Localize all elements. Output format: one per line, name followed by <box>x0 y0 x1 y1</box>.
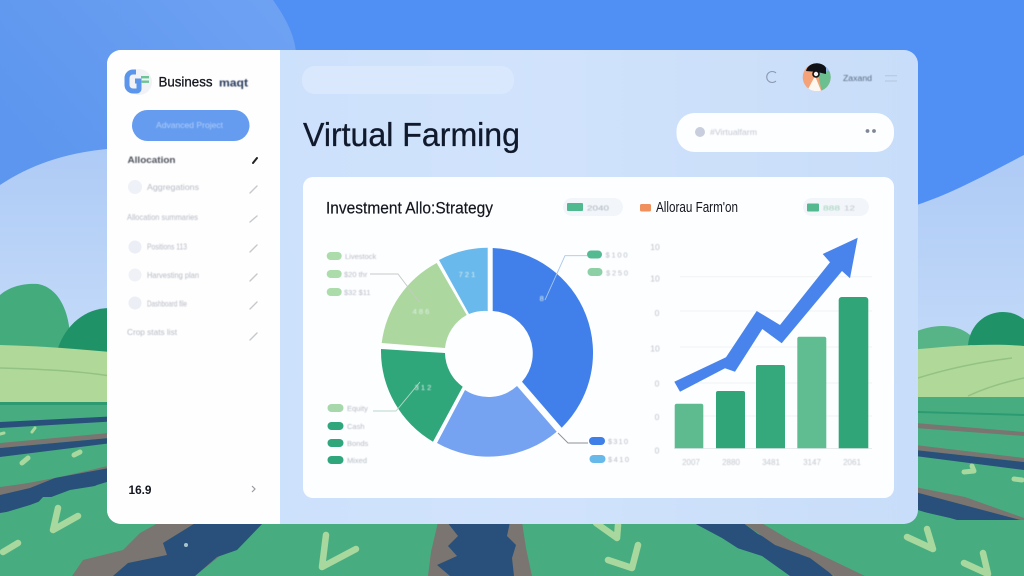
donut value labels: 3 1 2 <box>415 383 431 392</box>
x axis labels: 2880 <box>722 458 740 467</box>
menu icon <box>885 76 897 81</box>
donut legend chip: 2040 <box>587 204 609 212</box>
donut legend: lower left: Bonds <box>347 439 369 448</box>
segment: periwinkle <box>437 386 557 457</box>
bar legend chip <box>803 198 869 216</box>
menu item 3: Positions 113 <box>147 242 187 252</box>
left light field <box>0 345 120 405</box>
segment: dark green <box>381 349 463 442</box>
donut legend: lower left: Equity <box>347 404 368 413</box>
right hills <box>915 312 1024 352</box>
bar chart heading: Allorau Farm'on <box>656 199 738 216</box>
title: Virtual Farming <box>303 116 520 153</box>
bar legend chip: 888 <box>823 204 840 212</box>
donut legend: upper right <box>587 250 628 278</box>
bars <box>675 297 868 448</box>
menu item 6: Crop stats list <box>127 327 178 337</box>
logo <box>126 69 152 95</box>
y axis labels: 10 <box>650 242 660 252</box>
right dirt path <box>692 522 865 576</box>
center dirt path <box>428 522 532 576</box>
donut chart heading: Investment Allo:Strategy <box>326 198 493 218</box>
brand name: Business <box>158 74 212 90</box>
trend arrow <box>674 238 858 392</box>
menu item 4 <box>128 268 257 282</box>
left dirt path <box>72 522 264 576</box>
refresh icon <box>767 71 776 83</box>
x axis labels: 2061 <box>843 458 861 467</box>
menu item 5: Dashboard file <box>147 298 187 308</box>
donut value labels: 4 8 6 <box>413 307 429 316</box>
donut legend: upper left <box>327 252 377 297</box>
user avatar <box>802 63 832 93</box>
menu item 2 <box>127 212 257 222</box>
x axis labels: 3147 <box>803 458 821 467</box>
menu heading: allocation: Allocation <box>128 155 176 166</box>
sidebar footer: ratio <box>128 485 255 497</box>
donut legend: upper left: $32 $11 <box>344 288 371 297</box>
y axis labels: 0 <box>655 412 660 422</box>
donut legend: upper left: Livestock <box>345 252 377 261</box>
menu item 5 <box>128 296 257 310</box>
segment: light green <box>382 263 467 348</box>
sidebar footer: ratio: 16.9 <box>128 485 152 497</box>
background: farm landscape <box>0 284 1024 576</box>
sidebar panel <box>107 50 280 524</box>
brand name: maqt <box>219 78 248 90</box>
donut legend: upper right: $100 <box>606 250 628 260</box>
x axis labels: 3481 <box>762 458 780 467</box>
donut legend: lower left <box>328 404 369 465</box>
menu item 4: Harvesting plan <box>147 270 199 280</box>
leader lines <box>370 256 588 443</box>
bar chart with trend arrow <box>650 238 872 467</box>
donut legend: upper right: $250 <box>606 268 628 278</box>
filter pill <box>676 113 894 152</box>
y axis labels <box>650 242 660 456</box>
segment: blue <box>493 248 593 428</box>
x axis labels <box>682 458 861 467</box>
right light field <box>910 345 1024 400</box>
x axis labels: 2007 <box>682 458 700 467</box>
left hills <box>0 284 110 356</box>
menu item 1: Aggregations <box>147 182 199 192</box>
donut chart <box>370 248 593 457</box>
bar chart heading <box>640 199 738 216</box>
y axis labels: 0 <box>655 378 660 388</box>
donut legend: upper left: $20 thr <box>344 270 368 279</box>
menu item 2: Allocation summaries <box>127 212 198 222</box>
segment: sky <box>439 248 488 314</box>
donut value labels: 7 2 1 <box>459 270 475 279</box>
filter pill: #Virtualfarm <box>710 127 757 137</box>
main panel background <box>107 50 918 524</box>
add button: Advanced Project <box>156 120 224 130</box>
menu item 1 <box>128 180 257 194</box>
y axis labels: 10 <box>650 274 660 284</box>
donut legend chip <box>563 198 623 216</box>
foreground bushes <box>0 478 120 530</box>
y axis labels: 10 <box>650 344 660 354</box>
donut value labels <box>413 270 544 392</box>
menu item 6 <box>127 327 257 340</box>
lower fields <box>0 402 120 530</box>
donut legend: lower left: Cash <box>347 422 365 431</box>
y axis labels: 0 <box>655 308 660 318</box>
donut legend: lower right <box>589 437 629 464</box>
grid lines <box>674 277 872 448</box>
dashboard window <box>107 50 918 524</box>
y axis labels: 0 <box>655 446 660 456</box>
left furrows <box>0 416 120 514</box>
add button <box>132 110 250 141</box>
menu item 3 <box>128 240 257 254</box>
donut legend: lower left: Mixed <box>347 456 367 465</box>
sprouts <box>0 428 1022 574</box>
top search bar <box>302 66 514 94</box>
menu heading: allocation <box>128 155 257 166</box>
donut value labels: 8 <box>540 294 544 303</box>
brand name <box>158 74 248 90</box>
user name: Zaxand <box>843 74 872 83</box>
donut legend: lower right: $310 <box>608 437 628 446</box>
right furrows <box>915 423 1024 542</box>
donut legend: lower right: $410 <box>608 455 629 464</box>
chart card <box>303 177 894 498</box>
bar legend chip: 12 <box>844 204 855 212</box>
